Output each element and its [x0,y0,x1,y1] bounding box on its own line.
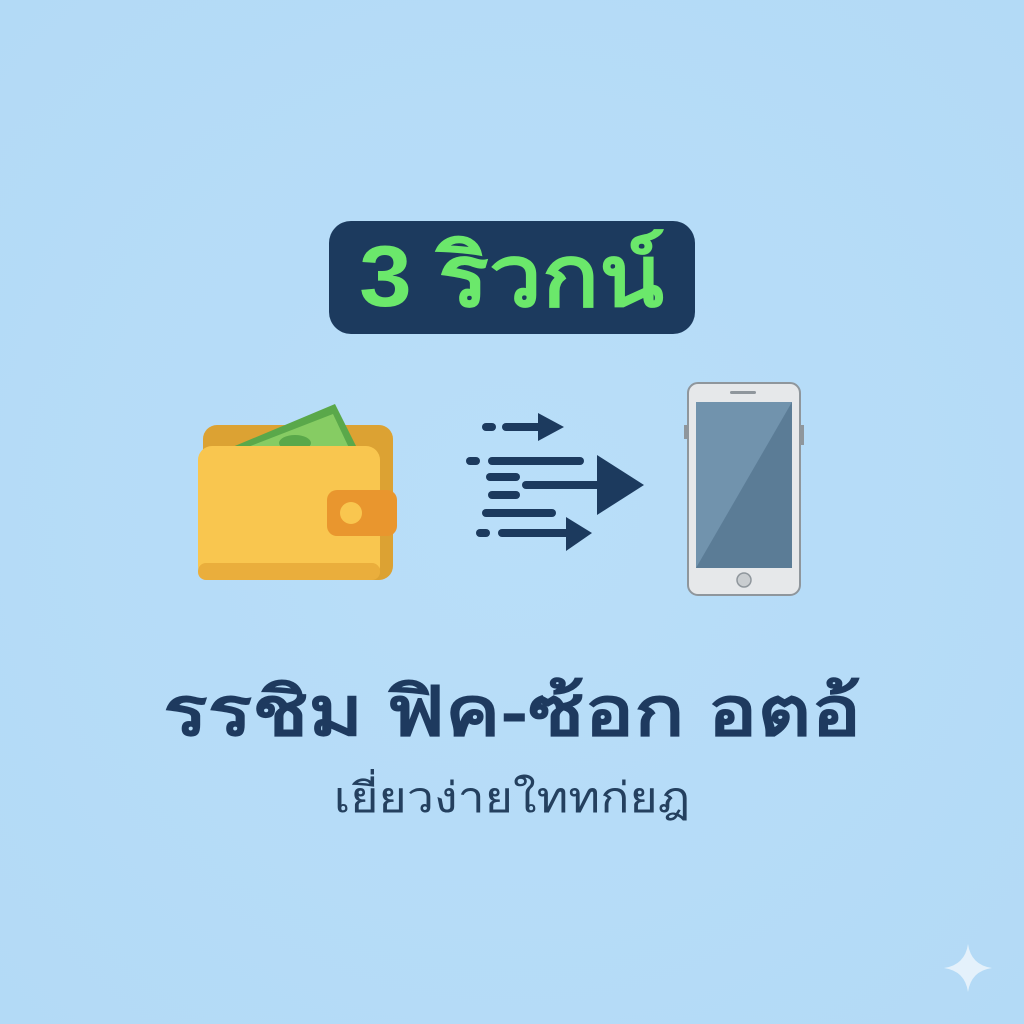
icon: wallet with cash [198,404,397,580]
icon: motion arrows [466,413,644,551]
main heading: รรชิม ฟิค-ซ้อก อตอ้ [163,674,861,750]
subheading: เยี่ยวง่ายใททก่ยฎ [334,774,690,821]
icon: smartphone [684,382,804,596]
icon: sparkle [944,944,992,992]
title pill: 3 ริวกน์ [360,229,664,325]
